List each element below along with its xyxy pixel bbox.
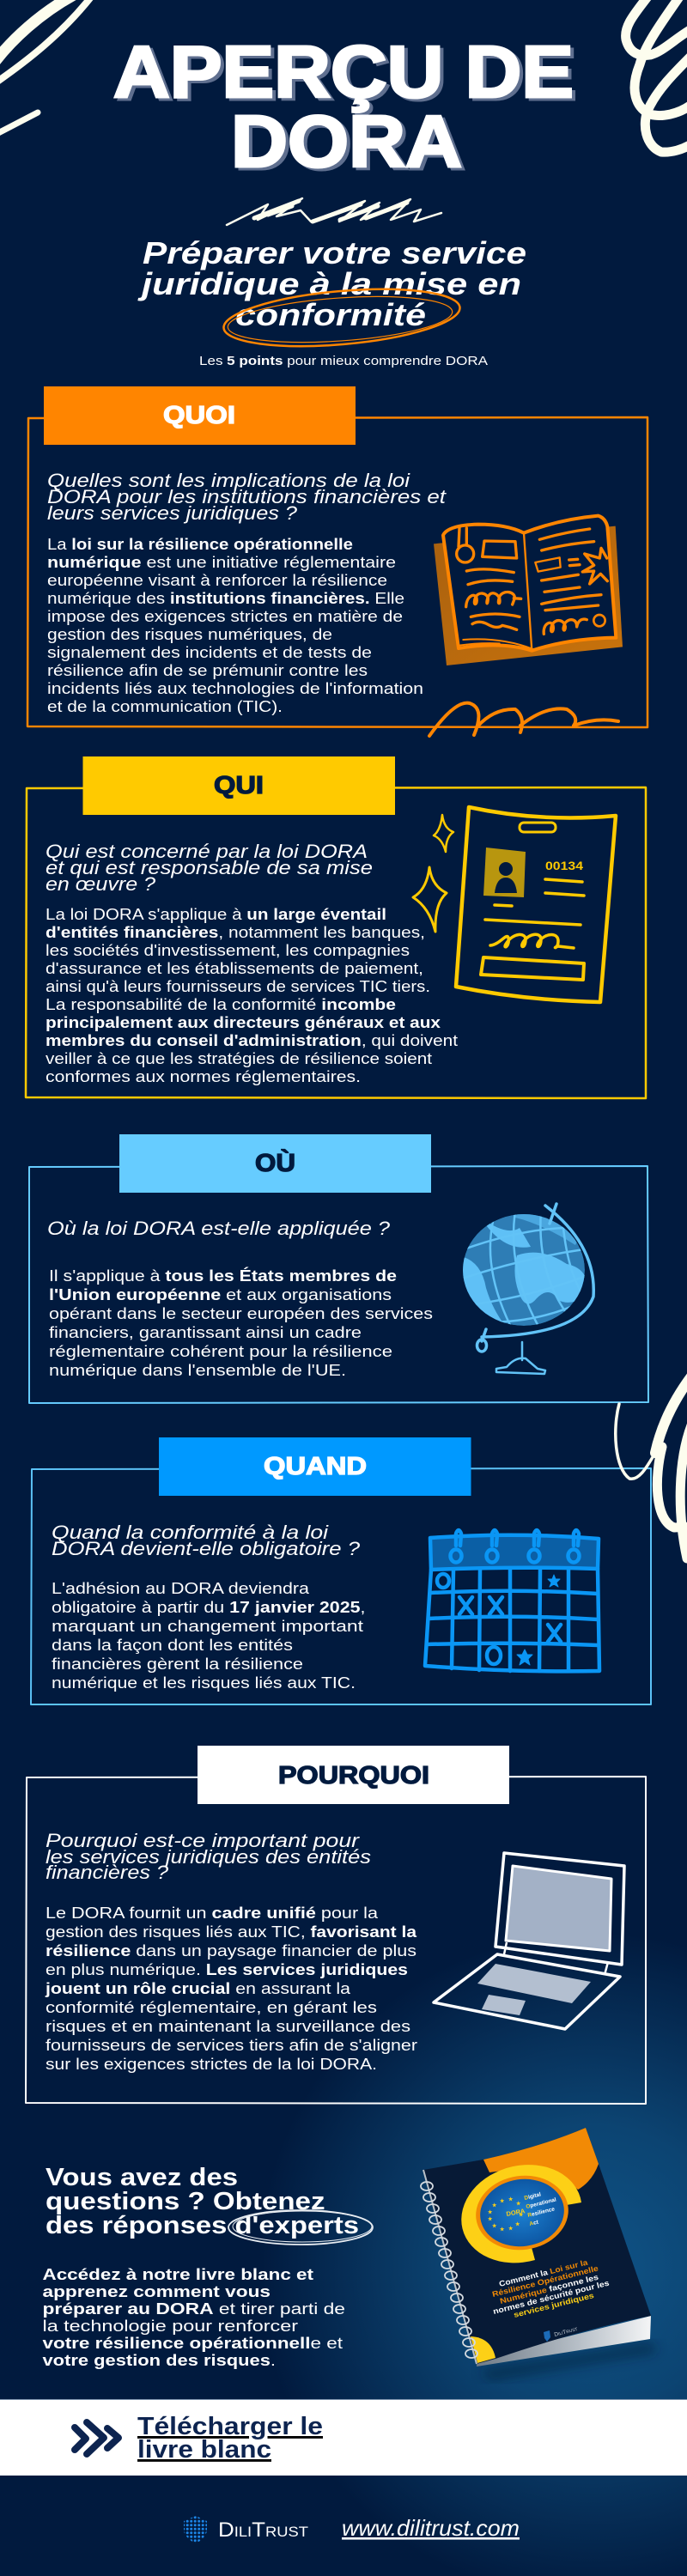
body text: où: numérique dans l'ensemble de l'UE.	[49, 1362, 346, 1379]
panel: quoi	[27, 386, 647, 736]
icon: id badge: 00134	[545, 859, 583, 872]
icon: open book	[434, 516, 623, 665]
cover title: Résilience Opérationnelle	[491, 2264, 599, 2299]
body text: quoi: La loi sur la résilience opérationnelle	[47, 536, 353, 553]
cover title: Comment la Loi sur la	[498, 2257, 589, 2288]
body text: où: opérant dans le secteur européen des services	[49, 1305, 433, 1322]
body text: pourquoi	[45, 1905, 417, 2073]
call to action heading: Vous avez des	[46, 2164, 238, 2191]
body text: quoi: incidents liés aux technologies de l'information	[47, 680, 423, 697]
cover badge text: ★	[488, 2216, 493, 2222]
question: pourquoi: Pourquoi est-ce important pour	[46, 1830, 361, 1851]
body text: quand	[52, 1580, 366, 1692]
question: quand	[52, 1522, 361, 1559]
panel: où	[29, 1134, 648, 1403]
panel: qui	[26, 756, 646, 1098]
body text: quand: marquant un changement important	[52, 1618, 363, 1635]
cover badge text: ★	[515, 2221, 520, 2227]
call to action text	[43, 2266, 345, 2369]
body text: pourquoi: jouent un rôle crucial en assurant la	[45, 1980, 351, 1997]
decoration: right-side scribble	[616, 1376, 687, 1558]
body text: pourquoi: gestion des risques liés aux TIC, favorisant la	[46, 1923, 417, 1941]
body text: pourquoi: risques et en maintenant la surveillance des	[46, 2018, 410, 2035]
call to action text: votre résilience opérationnell e et	[43, 2335, 343, 2352]
subtitle: juridique à la mise en	[137, 266, 521, 301]
cover badge text: Digital	[524, 2191, 542, 2202]
white paper cover	[421, 2128, 657, 2380]
call to action heading: des réponses d'experts	[46, 2212, 359, 2239]
highlight ellipse: conformité	[222, 281, 462, 355]
question: où: Où la loi DORA est-elle appliquée ?	[47, 1218, 391, 1239]
cover badge text: ★	[500, 2227, 505, 2233]
body text: quand: dans la façon dont les entités	[52, 1637, 293, 1654]
body text: pourquoi: résilience dans un paysage financier de plus	[46, 1942, 416, 1959]
cover badge text: Act	[529, 2219, 539, 2227]
body text: quand: obligatoire à partir du 17 janvier 2025 ,	[52, 1599, 366, 1616]
body text: quoi: et de la communication (TIC).	[47, 698, 283, 715]
binding rings	[421, 2182, 477, 2358]
decoration: scribble under title	[227, 198, 441, 225]
heading: pourquoi: POURQUOI	[278, 1762, 429, 1789]
question: quand: DORA devient-elle obligatoire ?	[52, 1538, 361, 1559]
white paper cover: DiliTrust	[554, 2326, 578, 2338]
panel: quand	[31, 1437, 651, 1704]
cover badge text: Resilience	[527, 2206, 556, 2219]
cover badge text: ★	[500, 2198, 505, 2204]
title: DORA	[231, 101, 462, 183]
decoration: orange scribble	[429, 703, 618, 736]
call to action text: apprenez comment vous	[43, 2283, 271, 2300]
body text: qui: membres du conseil d'administration , qui doivent	[46, 1032, 458, 1049]
download link: Télécharger le	[137, 2413, 323, 2440]
cover title: Numérique façonne les	[499, 2273, 599, 2306]
body text: où: réglementaire cohérent pour la résilience	[49, 1343, 392, 1360]
subtitle: Préparer votre service	[143, 235, 526, 270]
question: qui: et qui est responsable de sa mise	[46, 857, 373, 878]
cover badge text: ★	[508, 2196, 514, 2202]
icon: calendar	[425, 1530, 599, 1671]
cover title: services juridiques	[513, 2291, 595, 2319]
body text: qui	[46, 906, 458, 1085]
icon: id badge	[456, 807, 616, 1002]
question: pourquoi: les services juridiques des entités	[46, 1846, 371, 1868]
icon: laptop	[434, 1853, 624, 2029]
question: quoi	[47, 470, 447, 524]
body text: quoi: signalement des incidents et de tests de	[47, 644, 372, 661]
body text: qui: principalement aux directeurs généraux et aux	[46, 1014, 441, 1031]
body text: pourquoi: en plus numérique. Les services juridiques	[46, 1961, 408, 1978]
icon: globe	[455, 1204, 593, 1374]
body text: pourquoi: conformité réglementaire, en gérant les	[46, 1999, 377, 2016]
question: pourquoi	[46, 1830, 371, 1883]
body text: quand: numérique et les risques liés aux TIC.	[52, 1674, 356, 1692]
body text: qui: La responsabilité de la conformité incombe	[46, 996, 396, 1013]
body text: où: financiers, garantissant ainsi un cadre	[49, 1324, 362, 1341]
cover badge text: DORA	[506, 2207, 526, 2218]
title	[113, 32, 574, 183]
body text: où	[49, 1267, 433, 1379]
question: qui: en œuvre ?	[46, 873, 156, 895]
body text: où: Il s'applique à tous les États membres de	[49, 1267, 397, 1285]
cover badge text: ★	[492, 2223, 497, 2229]
body text: quoi: gestion des risques numériques, de	[47, 626, 332, 643]
body text: quoi: numérique des institutions financières. Elle	[47, 590, 404, 607]
body text: quoi	[47, 536, 423, 715]
heading: qui: QUI	[214, 772, 264, 799]
title: APERÇU DE	[113, 32, 574, 113]
heading: quoi	[44, 386, 356, 445]
call to action text: préparer au DORA et tirer parti de	[43, 2300, 345, 2318]
cover badge text: Operational	[526, 2196, 557, 2210]
body text: quand: L'adhésion au DORA deviendra	[52, 1580, 310, 1597]
cover title	[491, 2257, 610, 2319]
heading: pourquoi	[198, 1746, 509, 1804]
call to action heading: questions ? Obtenez	[46, 2188, 325, 2215]
cover badge text	[488, 2191, 557, 2233]
heading: quand: QUAND	[264, 1453, 367, 1480]
body text: qui: veiller à ce que les stratégies de résilience soient	[46, 1050, 432, 1067]
body text: qui: conformes aux normes réglementaires.	[46, 1068, 361, 1085]
body text: quoi: résilience afin de se prémunir contre les	[47, 662, 368, 679]
heading: où	[119, 1134, 431, 1193]
website link: www.dilitrust.com	[342, 2515, 520, 2541]
logo: dilitrust	[184, 2516, 308, 2543]
question: quand: Quand la conformité à la loi	[52, 1522, 329, 1543]
body text: quoi: impose des exigences strictes en matière de	[47, 608, 403, 625]
body text: qui: d'entités financières , notamment les banques,	[46, 924, 425, 941]
body text: quoi: européenne visant à renforcer la résilience	[47, 572, 387, 589]
body text: pourquoi: sur les exigences strictes de la loi DORA.	[46, 2056, 377, 2073]
intro line: Les 5 points pour mieux comprendre DORA	[199, 354, 488, 368]
download link	[137, 2413, 323, 2464]
heading: quand	[159, 1437, 471, 1496]
call to action text: la technologie pour renforcer	[43, 2318, 298, 2335]
icon: sparkles	[413, 815, 453, 932]
panel: pourquoi	[26, 1746, 646, 2104]
body text: quoi: numérique est une initiative réglementaire	[47, 554, 396, 571]
body text: qui: ainsi qu'à leurs fournisseurs de services TIC tiers.	[46, 978, 430, 995]
cover title: normes de sécurité pour les	[492, 2279, 610, 2316]
question: quoi: Quelles sont les implications de la loi	[47, 470, 410, 491]
cover badge text: ★	[519, 2212, 524, 2218]
subtitle	[137, 235, 526, 332]
body text: quand: financières gèrent la résilience	[52, 1656, 303, 1673]
cover badge text: ★	[488, 2209, 493, 2215]
heading: qui	[82, 756, 395, 815]
highlight ellipse: d'experts	[228, 2210, 373, 2245]
body text: qui: les sociétés d'investissement, les compagnies	[46, 942, 410, 959]
question: quoi: leurs services juridiques ?	[47, 502, 298, 524]
call to action text: votre gestion des risques .	[43, 2352, 276, 2369]
heading: quoi: QUOI	[163, 402, 235, 429]
logo: dilitrust: DiliTrust	[218, 2518, 308, 2542]
body text: où: l'Union européenne et aux organisations	[49, 1286, 392, 1303]
decoration: top-right scribble	[626, 0, 687, 152]
question: quoi: DORA pour les institutions financières et	[47, 486, 447, 507]
decoration: top-left scribble	[0, 0, 93, 135]
cover badge text: ★	[492, 2202, 497, 2208]
call to action heading	[46, 2164, 359, 2239]
download link: livre blanc	[137, 2436, 271, 2464]
cover badge text: ★	[516, 2201, 521, 2207]
body text: pourquoi: fournisseurs de services tiers afin de s'aligner	[46, 2037, 417, 2054]
question: pourquoi: financières ?	[46, 1862, 169, 1883]
icon: chevrons	[75, 2422, 119, 2454]
heading: où: OÙ	[255, 1148, 295, 1177]
body text: pourquoi: Le DORA fournit un cadre unifié pour la	[46, 1905, 379, 1922]
question: qui: Qui est concerné par la loi DORA	[46, 841, 368, 862]
subtitle: conformité	[235, 297, 426, 332]
download band	[0, 2399, 687, 2476]
cover badge text: ★	[508, 2226, 514, 2232]
body text: qui: La loi DORA s'applique à un large éventail	[46, 906, 386, 923]
question: qui	[46, 841, 373, 895]
call to action text: Accédez à notre livre blanc et	[43, 2266, 313, 2283]
body text: qui: d'assurance et les établissements de paiement,	[46, 960, 423, 977]
